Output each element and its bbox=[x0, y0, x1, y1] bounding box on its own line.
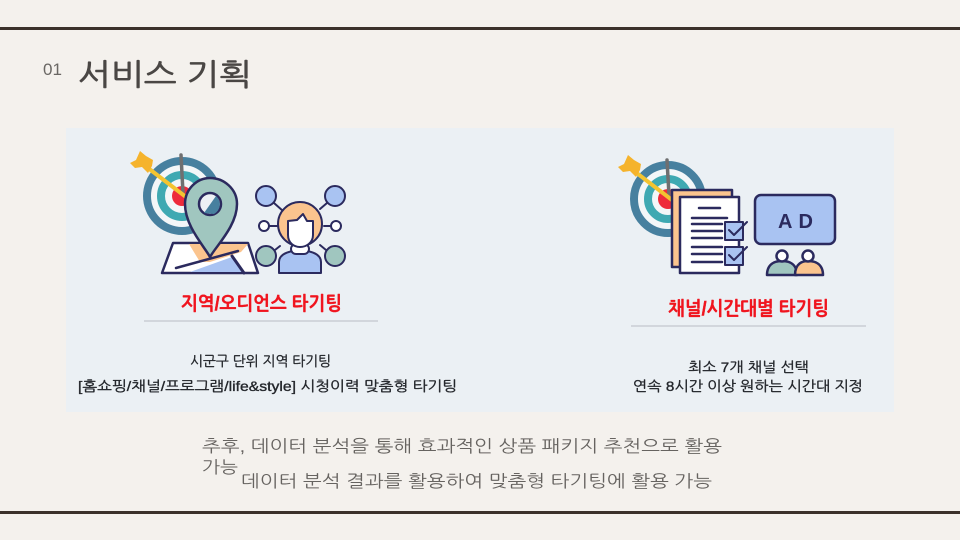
text block: footnotes: 가능 bbox=[202, 458, 238, 477]
icon: channel and time targeting bbox=[618, 155, 835, 275]
panel: targeting bbox=[66, 128, 894, 412]
text block: channel targeting description: 연속 8시간 이상 원하는 시간대 지정 bbox=[633, 378, 863, 394]
icon: region and audience targeting bbox=[130, 151, 345, 273]
icon: channel and time targeting: AD bbox=[778, 211, 819, 233]
text block: footnotes: 추후, 데이터 분석을 통해 효과적인 상품 패키지 추천으로 활용 bbox=[202, 437, 722, 456]
slide title: 서비스 기획 bbox=[78, 59, 252, 92]
text block: region targeting description bbox=[78, 353, 457, 394]
text block: footnotes: 데이터 분석 결과를 활용하여 맞춤형 타기팅에 활용 가능 bbox=[241, 472, 712, 491]
heading: region and audience targeting: 지역/오디언스 타기팅 bbox=[181, 293, 342, 315]
text block: region targeting description: [홈쇼핑/채널/프로그램/life&style] 시청이력 맞춤형 타기팅 bbox=[78, 378, 457, 394]
text block: channel targeting description: 최소 7개 채널 선택 bbox=[688, 359, 809, 375]
slide title: 01 bbox=[43, 60, 62, 79]
heading: channel and time targeting: 채널/시간대별 타기팅 bbox=[668, 298, 829, 320]
text block: footnotes bbox=[202, 437, 722, 491]
text block: region targeting description: 시군구 단위 지역 타기팅 bbox=[190, 353, 331, 369]
text block: channel targeting description bbox=[633, 359, 863, 394]
